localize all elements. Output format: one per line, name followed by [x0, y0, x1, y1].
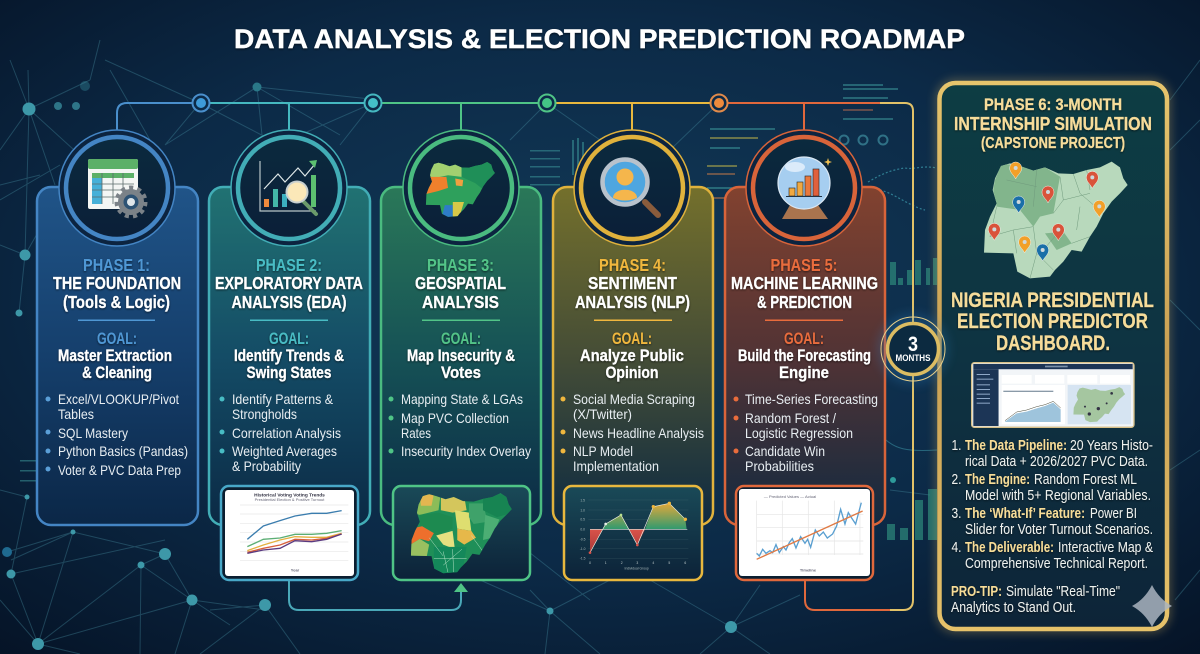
- chart: sentiment over time: 0: [589, 561, 591, 565]
- heading: & PREDICTION: [757, 292, 852, 312]
- chart: historical voting trends: Year: [291, 568, 300, 572]
- pro tip: PRO-TIP:: [951, 584, 1002, 600]
- bullet list: Identify Patterns &: [232, 391, 334, 407]
- panel: phase 3: [381, 130, 541, 580]
- heading: [415, 255, 506, 312]
- connector: top timeline: [117, 103, 913, 610]
- icon: crystal ball with bars: [746, 130, 862, 246]
- numbered list: Comprehensive Technical Report.: [965, 556, 1148, 572]
- goal: GOAL:: [441, 330, 481, 348]
- goal: Master Extraction: [58, 347, 172, 365]
- icon: chart with magnifier: [231, 130, 347, 246]
- bullet list: Insecurity Index Overlay: [401, 443, 531, 459]
- panel: phase 1: [37, 130, 198, 525]
- timeline node 3: [538, 94, 556, 112]
- heading: ANALYSIS (EDA): [232, 292, 347, 312]
- badge: 3 months: 3: [908, 333, 918, 356]
- bullet list: Implementation: [573, 458, 659, 474]
- chart: sentiment over time: 0.0: [580, 528, 585, 532]
- project title: NIGERIA PRESIDENTIAL: [951, 288, 1154, 312]
- heading: EXPLORATORY DATA: [215, 273, 363, 293]
- chart: sentiment over time: [564, 486, 702, 580]
- badge: 3 months: [877, 313, 949, 385]
- heading: MACHINE LEARNING: [731, 273, 878, 293]
- bullet list: [560, 391, 704, 474]
- pro tip: [951, 584, 1120, 616]
- chart: sentiment over time: 4: [652, 561, 654, 565]
- heading: PHASE 4:: [599, 255, 666, 275]
- panel: phase 2: [209, 130, 370, 580]
- chart: sentiment over time: 5: [668, 561, 670, 565]
- heading: [53, 255, 181, 312]
- goal: [407, 330, 515, 382]
- heading: GEOSPATIAL: [415, 273, 506, 293]
- heading: [575, 255, 690, 312]
- bullet list: SQL Mastery: [58, 425, 128, 441]
- icon: spreadsheet and gear: [59, 130, 175, 246]
- bullet list: News Headline Analysis: [573, 425, 704, 441]
- bullet list: Time-Series Forecasting: [745, 391, 878, 407]
- chart: sentiment over time: 6: [684, 561, 686, 565]
- heading: [215, 255, 363, 312]
- chart: sentiment over time: 1: [605, 561, 607, 565]
- numbered list: Random Forest ML: [1034, 472, 1137, 488]
- chart: forecast vs actual: — Predicted Values — Actual: [764, 494, 816, 499]
- heading: PHASE 6: 3-MONTH: [984, 96, 1122, 114]
- goal: GOAL:: [612, 330, 652, 348]
- heading: [954, 96, 1152, 152]
- numbered list: 4.: [952, 540, 962, 556]
- project title: DASHBOARD.: [996, 331, 1110, 355]
- heading: PHASE 5:: [770, 255, 838, 275]
- chart: forecast vs actual: Timeline: [800, 568, 817, 572]
- panel: phase 5: [725, 130, 885, 580]
- timeline node 4: [710, 94, 728, 112]
- heading: PHASE 1:: [83, 255, 150, 275]
- bullet list: Random Forest /: [745, 410, 836, 426]
- icon: sparkle: [1132, 585, 1172, 627]
- numbered list: [952, 438, 1153, 572]
- numbered list: 3.: [952, 506, 962, 522]
- bullet list: [388, 391, 531, 459]
- bullet list: Map PVC Collection: [401, 410, 509, 426]
- bullet list: Python Basics (Pandas): [58, 443, 188, 459]
- bullet list: (X/Twitter): [573, 406, 632, 422]
- title: DATA ANALYSIS & ELECTION PREDICTION ROADMAP: [234, 24, 965, 54]
- timeline node 2: [364, 94, 382, 112]
- icon: magnifier with person: [574, 130, 690, 246]
- heading: ANALYSIS (NLP): [575, 292, 690, 312]
- bullet list: Excel/VLOOKUP/Pivot: [58, 391, 179, 407]
- bullet list: Mapping State & LGAs: [401, 391, 523, 407]
- numbered list: Interactive Map &: [1058, 540, 1153, 556]
- project title: [951, 288, 1154, 355]
- chart: sentiment over time: 0.5: [580, 518, 585, 522]
- heading: INTERNSHIP SIMULATION: [954, 113, 1152, 134]
- bullet list: Social Media Scraping: [573, 391, 695, 407]
- bullet list: Logistic Regression: [745, 425, 853, 441]
- heading: PHASE 3:: [427, 255, 494, 275]
- numbered list: The Deliverable:: [965, 540, 1054, 556]
- numbered list: Power BI: [1090, 506, 1137, 522]
- numbered list: 20 Years Histo-: [1070, 438, 1153, 454]
- numbered list: The ‘What-If’ Feature:: [965, 506, 1085, 522]
- bullet list: Tables: [58, 406, 94, 422]
- map: Nigeria with pins: [984, 162, 1128, 278]
- goal: Identify Trends &: [234, 347, 344, 365]
- chart: sentiment over time: Individual Group: [625, 566, 649, 570]
- chart: sentiment over time: -1.5: [580, 557, 586, 561]
- bullet list: Correlation Analysis: [232, 425, 341, 441]
- numbered list: Model with 5+ Regional Variables.: [965, 488, 1151, 504]
- goal: [738, 330, 871, 382]
- panel: phase 4: [553, 130, 713, 580]
- heading: THE FOUNDATION: [53, 273, 181, 293]
- chart: sentiment over time: 2: [621, 561, 623, 565]
- bullet list: [46, 391, 188, 478]
- bullet list: [220, 391, 341, 474]
- pro tip: Simulate "Real-Time": [1006, 584, 1120, 600]
- arrow: phase 2 to phase 3: [289, 578, 468, 610]
- chart: historical voting trends: Presidential Election & Positive Turnout: [255, 497, 325, 502]
- bullet list: Weighted Averages: [232, 443, 337, 459]
- goal: Swing States: [246, 364, 332, 382]
- numbered list: rical Data + 2026/2027 PVC Data.: [965, 454, 1148, 470]
- bullet list: Voter & PVC Data Prep: [58, 462, 181, 478]
- bullet list: Probabilities: [745, 458, 814, 474]
- heading: PHASE 2:: [256, 255, 322, 275]
- bullet list: [734, 391, 878, 474]
- chart: forecast vs actual: [736, 486, 873, 580]
- bullet list: & Probability: [232, 458, 301, 474]
- heading: ANALYSIS: [422, 292, 499, 312]
- goal: GOAL:: [784, 330, 824, 348]
- chart: sentiment over time: 3: [636, 561, 638, 565]
- goal: & Cleaning: [82, 364, 152, 382]
- heading: (Tools & Logic): [63, 292, 170, 312]
- timeline node 1: [192, 94, 210, 112]
- goal: Votes: [441, 364, 481, 382]
- bullet list: Strongholds: [232, 406, 297, 422]
- bullet list: NLP Model: [573, 443, 633, 459]
- goal: Map Insecurity &: [407, 347, 515, 365]
- panel: phase 6 capstone: [940, 83, 1172, 629]
- chart: historical voting trends: [221, 486, 358, 580]
- numbered list: The Data Pipeline:: [965, 438, 1067, 454]
- numbered list: The Engine:: [965, 472, 1030, 488]
- numbered list: 1.: [952, 438, 962, 454]
- pro tip: Analytics to Stand Out.: [951, 600, 1076, 616]
- goal: [234, 330, 344, 382]
- bullet list: Candidate Win: [745, 443, 825, 459]
- dashboard screenshot: [972, 363, 1134, 427]
- heading: SENTIMENT: [588, 273, 677, 293]
- chart: sentiment over time: 1.5: [580, 499, 585, 503]
- project title: ELECTION PREDICTOR: [957, 309, 1148, 333]
- chart: historical voting trends: Historical Voting Voting Trends: [254, 492, 325, 498]
- badge: 3 months: MONTHS: [896, 353, 930, 364]
- goal: GOAL:: [269, 330, 309, 348]
- goal: Opinion: [606, 364, 658, 382]
- chart: sentiment over time: 1.0: [580, 508, 585, 512]
- map: election results by state: [393, 486, 530, 580]
- goal: Engine: [779, 364, 829, 382]
- bullet list: Rates: [401, 425, 431, 441]
- goal: GOAL:: [97, 330, 137, 348]
- goal: [580, 330, 684, 382]
- heading: (CAPSTONE PROJECT): [981, 135, 1125, 152]
- numbered list: 2.: [952, 472, 962, 488]
- goal: Analyze Public: [580, 347, 684, 365]
- heading: [731, 255, 878, 312]
- goal: Build the Forecasting: [738, 347, 871, 365]
- chart: sentiment over time: -0.5: [580, 538, 586, 542]
- numbered list: Slider for Voter Turnout Scenarios.: [965, 522, 1153, 538]
- chart: sentiment over time: -1.0: [580, 547, 586, 551]
- goal: [58, 330, 172, 382]
- icon: coloured Nigeria map: [403, 130, 519, 246]
